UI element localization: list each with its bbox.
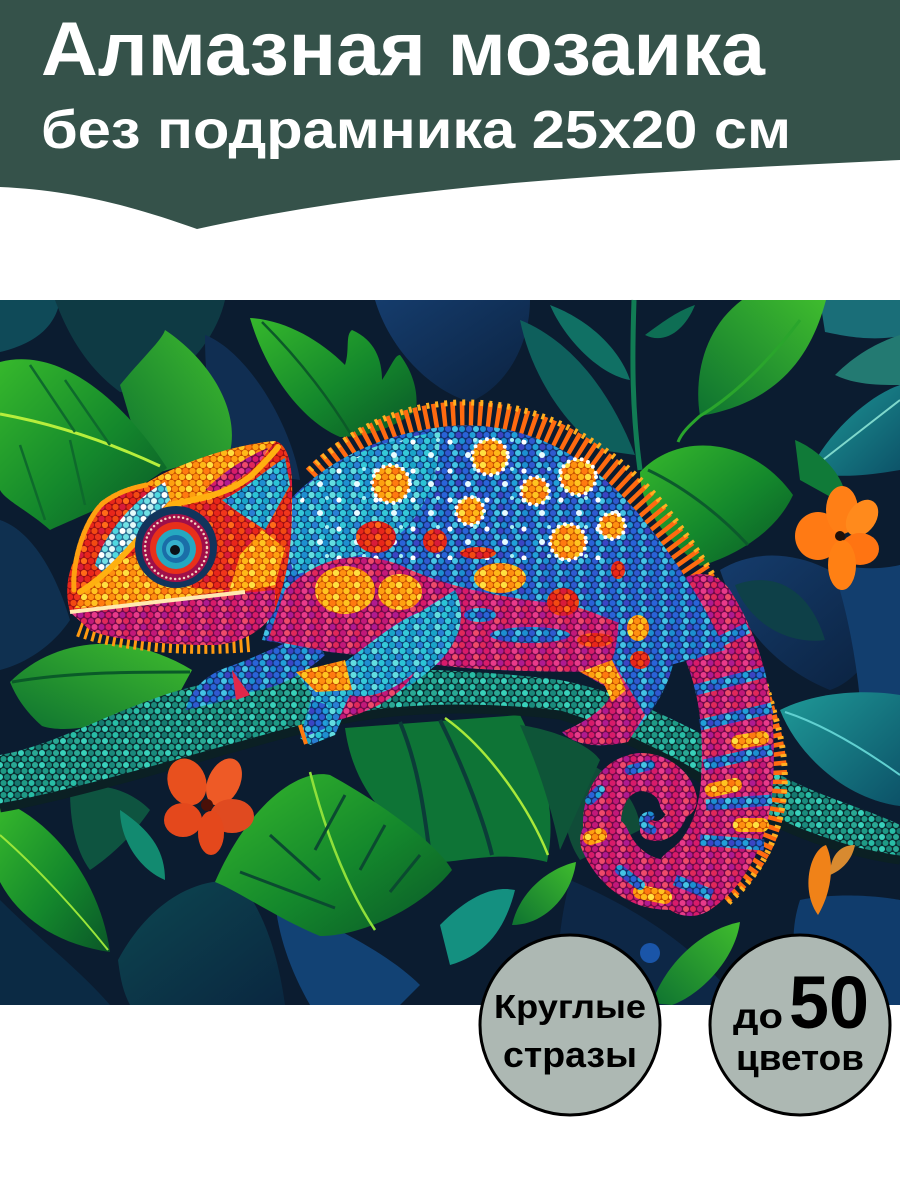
cyan snout patch [95,482,170,575]
badge: up to 50 colours: цветов [736,1037,864,1078]
badge: round rhinestones [480,935,660,1115]
far front leg [186,632,325,710]
lip line [70,592,245,612]
snout rim [74,485,146,590]
teal shoulder patch [286,432,440,575]
orange bud right [808,845,855,915]
badge: up to 50 colours: 50 [789,961,869,1044]
banner shape [0,0,900,229]
panel: painting of chameleon in the jungle [0,300,900,1005]
rim of the eye ridge [80,447,278,592]
branch [0,669,900,860]
spikes along the back [310,402,785,903]
small leaves bottom centre [440,862,740,1005]
eye [135,506,217,588]
chameleon body [262,425,725,672]
chameleon head [67,441,292,645]
subtitle: без подрамника 25х20 см [41,100,791,160]
green leaf: right centre [640,445,793,566]
blue temple patch [222,458,290,530]
picture background [0,300,900,1005]
badge: round rhinestones: стразы [503,1034,637,1075]
back leg [562,585,675,745]
back spots with white dotted rings [372,439,625,560]
green leaf: upper left [0,330,232,530]
title: Алмазная мозаика [41,7,766,92]
badge: up to 50 colours: до [733,997,783,1036]
badge: up to 50 colours [710,935,890,1115]
flank patches [423,529,625,647]
crest orange band [145,441,275,508]
teal leaf right [780,692,900,806]
green leaf: bottom monstera [215,772,452,936]
front leg [296,590,461,745]
header banner [0,0,900,229]
teal fronds top right [520,300,900,505]
green leaf: bottom left [0,800,110,952]
orange shoulder patch [315,521,422,614]
dark blue background foliage [0,300,900,1005]
magenta crest stripe [205,448,268,492]
green leaf: top right [678,300,826,442]
green leaf: centre fern [345,715,600,862]
pink belly [268,557,640,672]
badge: round rhinestones: Круглые [494,988,646,1025]
red flower left [161,753,254,855]
lower jaw [70,590,275,645]
chin spikes [80,626,250,643]
cheek orange [75,555,230,608]
orange flower right [795,486,885,590]
green leaf: top monstera [250,318,417,437]
green leaf: lower left [10,644,192,729]
white specks on the back [300,431,625,560]
chameleon tail [590,610,772,897]
